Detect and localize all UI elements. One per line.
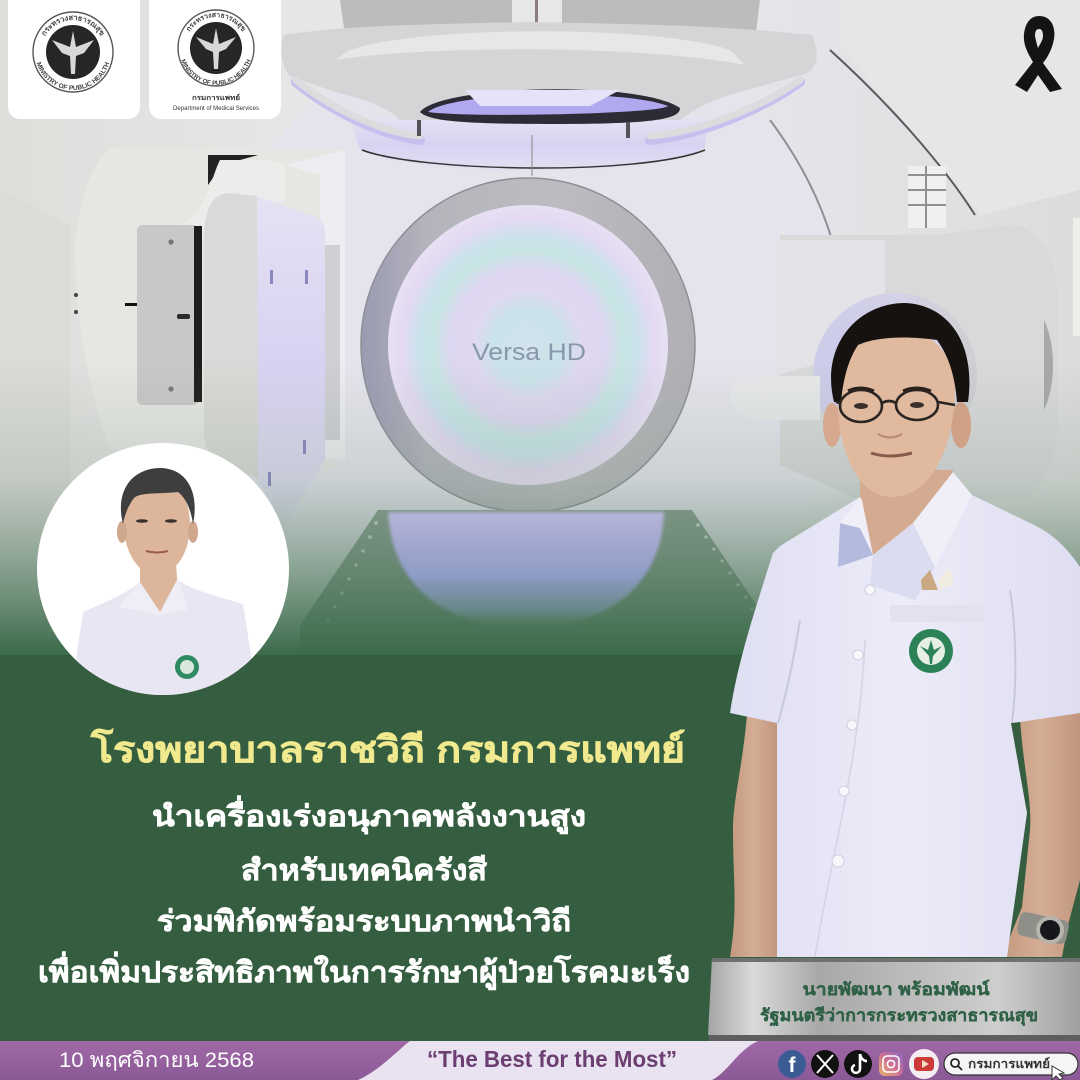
green emblem patch xyxy=(909,629,953,673)
ears xyxy=(823,403,841,447)
arms xyxy=(730,715,778,957)
footer bar xyxy=(0,1041,1080,1080)
portrait: minister standing xyxy=(730,303,1080,957)
icon: Instagram xyxy=(879,1052,903,1076)
body text: headline xyxy=(38,795,690,990)
right imaging arm xyxy=(730,166,1080,500)
collar xyxy=(838,523,873,567)
patient couch xyxy=(300,510,760,660)
watch xyxy=(1016,911,1070,945)
central gantry bore xyxy=(208,18,852,662)
glasses xyxy=(836,390,955,422)
icon: X xyxy=(811,1050,839,1078)
icon: facebook: f xyxy=(788,1054,796,1077)
green text panel xyxy=(0,655,1080,1045)
logo card: Department of Medical Services: กระทรวงสาธารณสุข xyxy=(187,12,246,32)
icon: black mourning ribbon xyxy=(1015,16,1062,92)
logo card: Department of Medical Services xyxy=(149,0,281,119)
Versa HD collimator disc xyxy=(361,178,695,512)
body text: headline: นำเครื่องเร่งอนุภาคพลังงานสูง xyxy=(152,795,586,834)
logo card: Ministry of Public Health xyxy=(8,0,140,119)
icon: YouTube xyxy=(909,1049,939,1079)
name plate: รัฐมนตรีว่าการกระทรวงสาธารณสุข xyxy=(760,1005,1038,1027)
Versa HD collimator disc: Versa HD xyxy=(472,339,586,366)
heading: hospital name: โรงพยาบาลราชวิถี กรมการแพทย์ xyxy=(90,728,685,770)
body text: headline: เพื่อเพิ่มประสิทธิภาพในการรักษาผู้ป่วยโรคมะเร็ง xyxy=(38,951,690,990)
pocket xyxy=(890,605,984,622)
left imaging arm xyxy=(74,148,345,527)
logo card: Department of Medical Services: Department of Medical Services xyxy=(173,106,259,112)
search box xyxy=(944,1053,1078,1080)
shirt xyxy=(730,495,1080,957)
couch glow reflection xyxy=(388,512,664,628)
neck xyxy=(860,470,953,555)
nose and mouth xyxy=(878,434,902,438)
logo card: Ministry of Public Health: MINISTRY OF PUBLIC HEALTH xyxy=(36,62,110,90)
search box: กรมการแพทย์ xyxy=(968,1057,1050,1071)
lavender glow under the handles xyxy=(296,82,800,140)
name plate: นายพัฒนา พร้อมพัฒน์ xyxy=(802,979,990,999)
top treatment head xyxy=(282,0,817,176)
hair xyxy=(831,303,969,402)
name plate xyxy=(708,958,1080,1041)
logo card: Department of Medical Services: MINISTRY OF PUBLIC HEALTH xyxy=(181,59,251,85)
body text: headline: ร่วมพิกัดพร้อมระบบภาพนำวิถี xyxy=(157,906,571,938)
date: 10 พฤศจิกายน 2568 xyxy=(59,1049,254,1072)
slogan: “The Best for the Most” xyxy=(427,1046,677,1072)
face xyxy=(838,330,955,497)
background: linac treatment machine xyxy=(0,0,1080,662)
logo card: Ministry of Public Health: กระทรวงสาธารณสุข xyxy=(42,15,104,36)
portrait: hospital director in circle xyxy=(37,443,289,700)
icon: TikTok xyxy=(844,1050,872,1078)
pins xyxy=(921,570,938,590)
icon: facebook xyxy=(778,1050,806,1078)
logo card: Department of Medical Services: กรมการแพทย์ xyxy=(192,93,240,102)
body text: headline: สำหรับเทคนิครังสี xyxy=(241,855,487,887)
buttons xyxy=(832,585,875,867)
